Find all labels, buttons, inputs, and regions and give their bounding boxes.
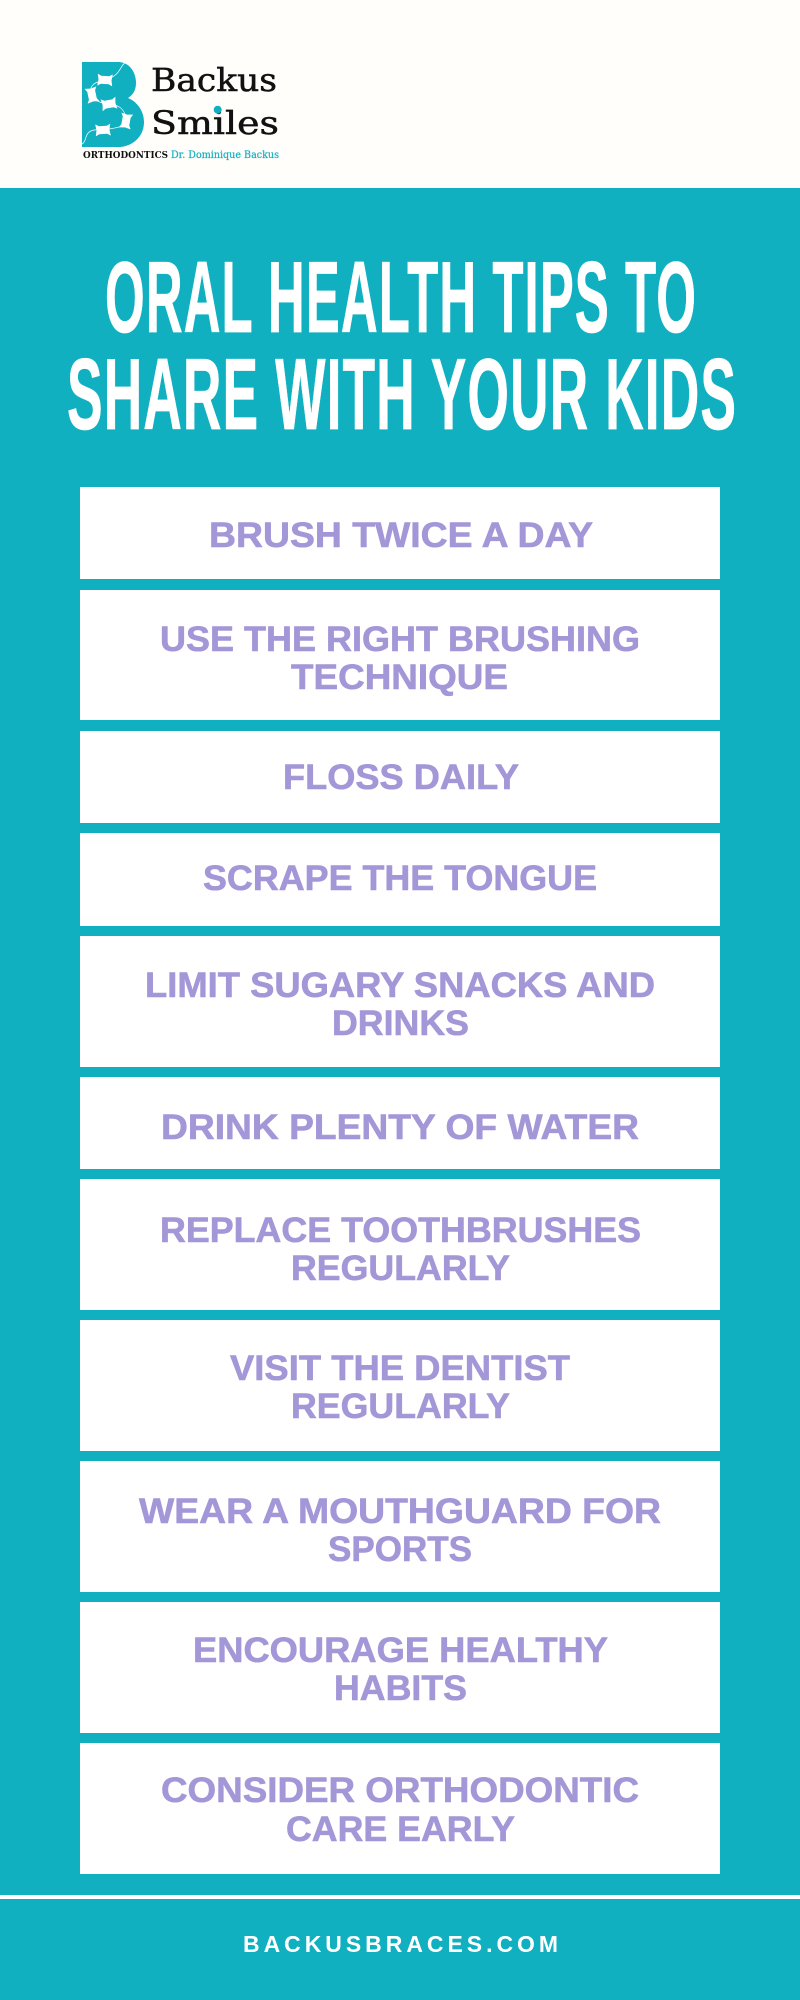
panel: tip 10 [80,1602,720,1733]
panel: tip 7: REGULARLY [291,1249,510,1288]
panel: tip 11: CARE EARLY [286,1810,515,1849]
panel: tip 1 [80,487,720,579]
panel: tip 5: LIMIT SUGARY SNACKS AND [145,966,655,1005]
footer website: BACKUSBRACES.COM [243,1931,562,1957]
panel: tip 2: TECHNIQUE [291,658,508,697]
panel: tip 10: HABITS [334,1669,467,1708]
panel: tip 6: DRINK PLENTY OF WATER [161,1108,639,1147]
panel: tip 8: VISIT THE DENTIST [230,1349,570,1388]
panel: tip 4: SCRAPE THE TONGUE [203,859,597,898]
panel: tip 8: REGULARLY [291,1387,510,1426]
logo: Backus Smiles Orthodontics [82,61,279,161]
logo tagline: doctor name: Dr. Dominique Backus [171,150,279,161]
logo tagline: Orthodontics: ORTHODONTICS [83,150,168,161]
panel: tip 10: ENCOURAGE HEALTHY [193,1631,608,1670]
logo wordmark: Backus: Backus [151,61,277,99]
logo wordmark: Smiles: Smiles [151,104,279,142]
footer divider [0,1895,800,1899]
panel: tip 2: USE THE RIGHT BRUSHING [160,620,640,659]
panel: tip 3 [80,731,720,823]
panel: tip 7 [80,1179,720,1310]
logo dot on letter i [214,106,222,114]
panel: tip 1: BRUSH TWICE A DAY [209,516,593,555]
panel: tip 8 [80,1320,720,1451]
panel: tip 11: CONSIDER ORTHODONTIC [161,1771,639,1810]
panel: tip 2 [80,590,720,720]
panel: tip 9: WEAR A MOUTHGUARD FOR [139,1492,661,1531]
panel: tip 7: REPLACE TOOTHBRUSHES [160,1211,641,1250]
panel: tip 9: SPORTS [328,1530,472,1569]
panel: tip 3: FLOSS DAILY [283,758,519,797]
panel: tip 5: DRINKS [332,1004,469,1043]
panel: tip 4 [80,833,720,926]
icon: letter B with braces [82,62,144,147]
title [67,242,737,451]
panel: tip 5 [80,936,720,1067]
panel: tip 6 [80,1077,720,1169]
panel: tip 9 [80,1461,720,1592]
header band with logo [0,0,800,188]
panel: tip 11 [80,1743,720,1874]
